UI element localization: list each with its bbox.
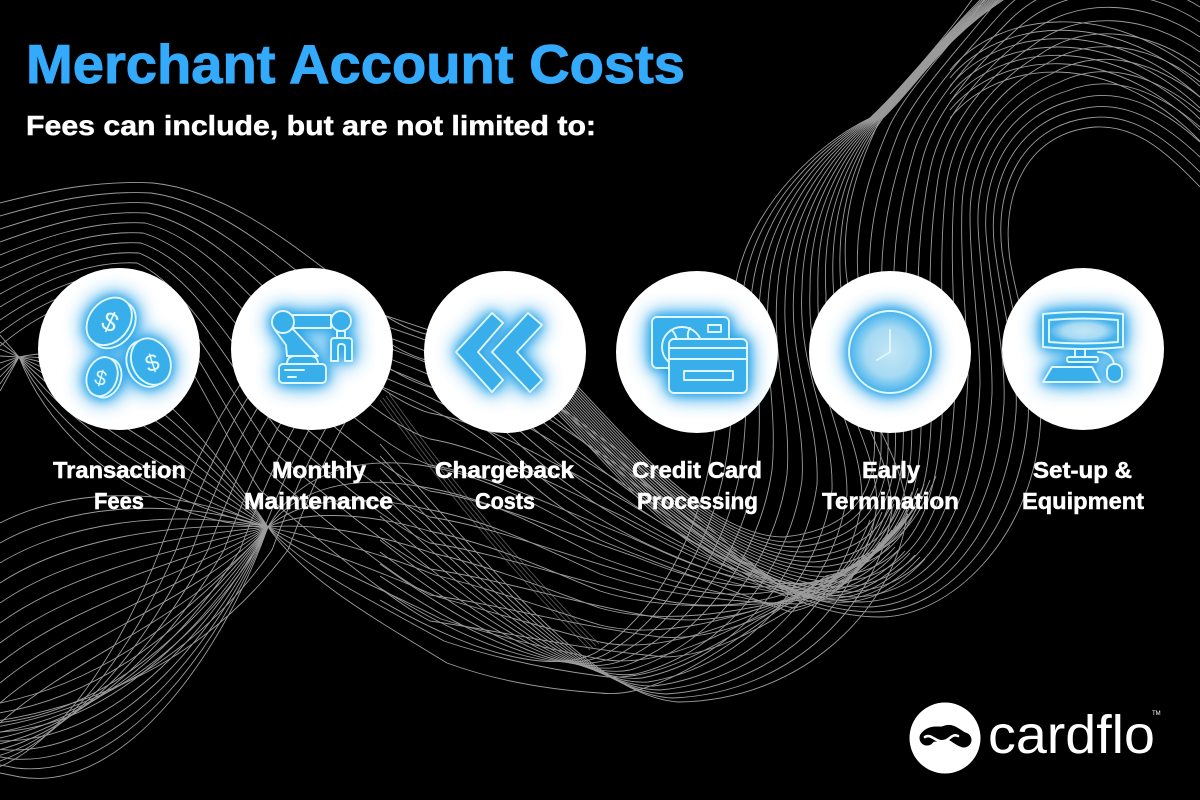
panel: Monthly Maintenance [231, 268, 393, 514]
label: Monthly [272, 457, 366, 483]
label: Early [862, 457, 920, 483]
icon: coins: $ [142, 349, 163, 378]
panel: Credit Card Processing [616, 271, 778, 514]
label: Processing [637, 488, 758, 514]
label [244, 457, 393, 514]
icon: coins: $ [92, 366, 110, 391]
panel: Chargeback Costs [424, 271, 586, 514]
icon: coins: $ [97, 305, 123, 339]
label: Transaction [53, 457, 186, 483]
icon: double chevrons [456, 313, 542, 392]
subtitle: Fees can include, but are not limited to: [26, 110, 596, 141]
label: Equipment [1022, 488, 1144, 514]
label: Costs [475, 488, 535, 514]
icon: clock [849, 311, 931, 393]
title: Merchant Account Costs [26, 33, 685, 95]
label [1022, 457, 1144, 514]
label: Set-up & [1033, 457, 1132, 483]
label: Credit Card [632, 457, 762, 483]
panel: Set-up & Equipment [1002, 268, 1164, 514]
logo: cardflo: TM [1152, 711, 1161, 717]
logo: cardflo: cardflo [988, 705, 1155, 765]
icon: robot arm [272, 311, 352, 383]
label: Fees [94, 488, 144, 514]
panel: Transaction Fees [38, 268, 200, 514]
label [822, 457, 959, 514]
icon: computer [1043, 312, 1123, 382]
logo: cardflo [910, 702, 1161, 774]
icon: credit cards [652, 317, 747, 393]
label [53, 457, 186, 514]
label: Chargeback [435, 457, 574, 483]
label [435, 457, 574, 514]
label: Maintenance [244, 488, 393, 514]
label: Termination [822, 488, 959, 514]
panel: Early Termination [809, 271, 971, 514]
icon: coins [77, 289, 178, 402]
label [632, 457, 762, 514]
